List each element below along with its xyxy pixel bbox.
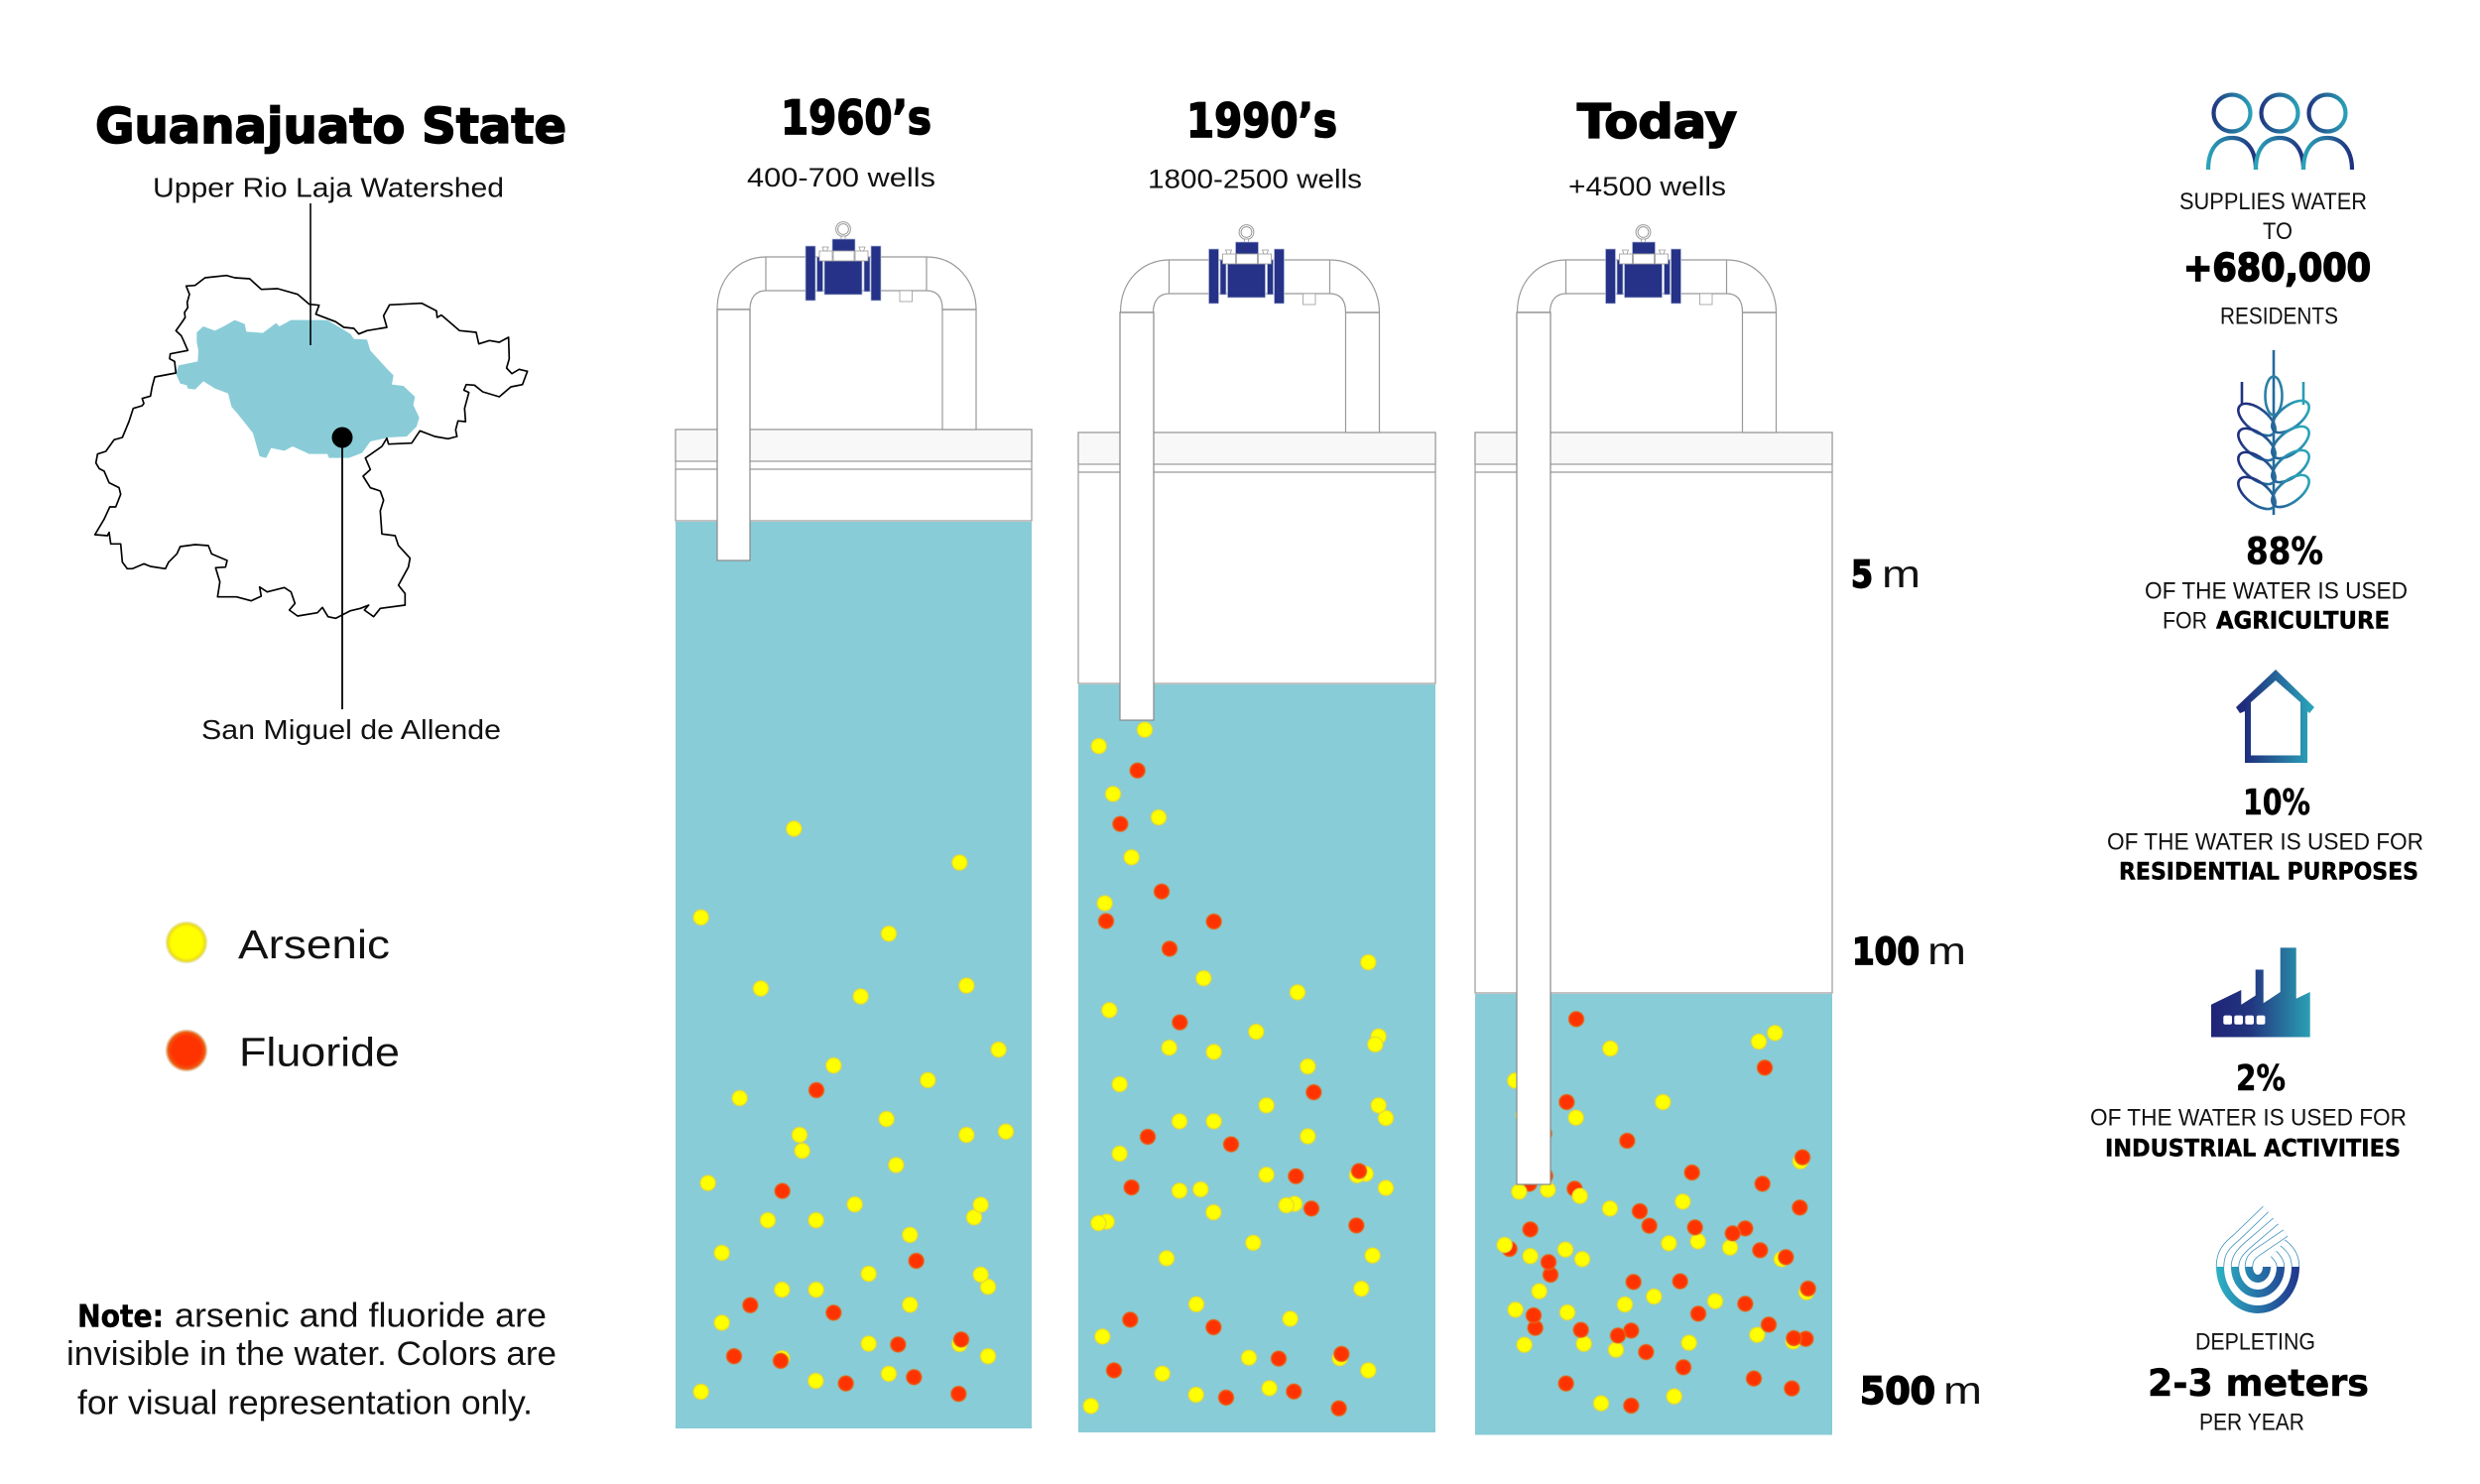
label: watershed: Upper Rio Laja Watershed (153, 173, 504, 202)
stat: agriculture: OF THE WATER IS USED (2145, 577, 2408, 605)
legend label: fluoride: Fluoride (239, 1030, 400, 1075)
ground layer (1475, 433, 1832, 993)
icon: water drop (2220, 1209, 2295, 1309)
label: San Miguel de Allende: San Miguel de Allende (201, 714, 501, 745)
stat: residential (2107, 670, 2423, 885)
depth label: 5 m (1851, 554, 1921, 596)
depth label: 5 m: m (1882, 554, 1921, 596)
stat: residents: SUPPLIES WATER (2179, 188, 2367, 215)
depth label: 5 m: 5 (1851, 554, 1873, 596)
heading: 1960’s (781, 91, 931, 146)
note: Note: (77, 1299, 164, 1335)
stat: residential: OF THE WATER IS USED FOR (2107, 829, 2423, 855)
stat: residential: RESIDENTIAL PURPOSES (2119, 857, 2418, 885)
stat: depletion: 2-3 meters (2148, 1362, 2369, 1405)
stat: depletion: PER YEAR (2199, 1409, 2304, 1436)
well count: +4500 wells (1568, 172, 1726, 201)
leader line: watershed (310, 203, 311, 345)
stat: residential: 10% (2243, 783, 2310, 823)
state outline (95, 276, 528, 618)
title: Guanajuato State (95, 98, 566, 155)
well pipe (1517, 312, 1550, 1184)
stat: industrial (2090, 947, 2407, 1163)
panel: 1990's well (1078, 94, 1435, 1432)
stat: residents: +680,000 (2183, 246, 2371, 290)
icon: people (2208, 95, 2352, 170)
leader line: San Miguel (341, 437, 343, 709)
stat: agriculture: AGRICULTURE (2216, 607, 2390, 635)
stat: depletion: DEPLETING (2195, 1329, 2315, 1355)
icon: house (2236, 670, 2314, 763)
note: arsenic and fluoride are (175, 1298, 547, 1335)
depth label: 500 m (1860, 1370, 1982, 1413)
stat: industrial: 2% (2236, 1058, 2286, 1099)
legend swatch: fluoride (165, 1030, 208, 1071)
legend label: arsenic: Arsenic (238, 922, 390, 967)
marker: San Miguel de Allende (331, 427, 353, 448)
stat: agriculture (2145, 350, 2408, 635)
stat: depletion (2148, 1209, 2369, 1436)
stat: residents: TO (2263, 218, 2293, 245)
ground layer (1078, 433, 1435, 683)
ground layer (676, 430, 1032, 521)
legend swatch: arsenic (165, 921, 208, 964)
water column (676, 522, 1032, 1428)
icon: wheat (2233, 350, 2314, 515)
pipe and valve (717, 222, 976, 430)
icon: factory (2211, 947, 2310, 1038)
legend (165, 921, 400, 1075)
water column (1078, 684, 1435, 1432)
map: Guanajuato state (95, 203, 528, 709)
depth label: 100 m: m (1927, 930, 1966, 973)
well count: 1800-2500 wells (1148, 165, 1362, 194)
note: invisible in the water. Colors are (66, 1335, 557, 1373)
watershed area (176, 320, 420, 458)
contaminant dots (692, 820, 1015, 1403)
stat: agriculture: FOR (2163, 607, 2207, 635)
depth label: 100 m (1852, 930, 1966, 973)
contaminant dots (1082, 721, 1395, 1417)
note: for visual representation only. (77, 1385, 533, 1422)
well count: 400-700 wells (747, 163, 935, 192)
stat: agriculture: 88% (2246, 530, 2323, 573)
stat: residents (2179, 95, 2371, 329)
panel: Today well (1475, 95, 1832, 1434)
water column (1475, 994, 1832, 1434)
stat: residents: RESIDENTS (2220, 304, 2338, 329)
note (66, 1298, 557, 1422)
depth label: 500 m: 500 (1860, 1370, 1935, 1413)
well pipe (1120, 312, 1154, 720)
stat: industrial: OF THE WATER IS USED FOR (2090, 1105, 2407, 1131)
pipe and valve (1518, 225, 1776, 433)
panel: 1960's well (676, 91, 1032, 1428)
heading: 1990’s (1186, 94, 1337, 149)
heading: Today (1577, 95, 1737, 150)
depth label: 100 m: 100 (1852, 930, 1920, 973)
depth label: 500 m: m (1943, 1370, 1982, 1413)
well pipe (717, 309, 750, 560)
pipe and valve (1121, 225, 1379, 433)
stat: industrial: INDUSTRIAL ACTIVITIES (2105, 1135, 2401, 1163)
contaminant dots (1496, 1011, 1816, 1415)
